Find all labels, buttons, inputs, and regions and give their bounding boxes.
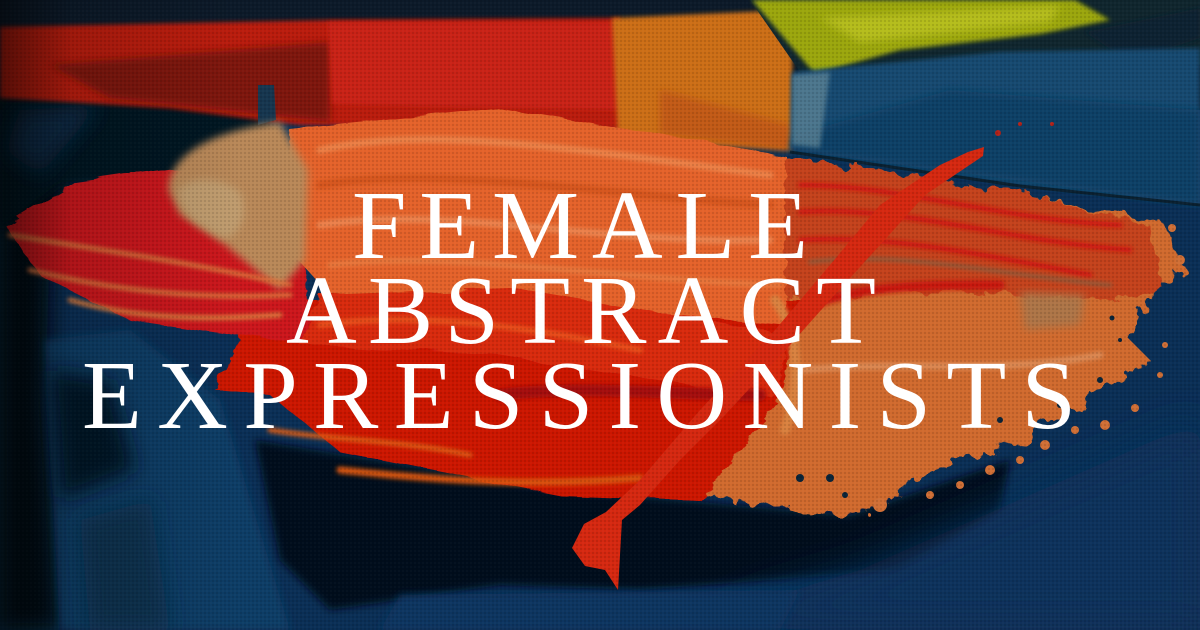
diagonal red drip xyxy=(572,147,984,590)
red top band xyxy=(0,18,625,130)
yellow green paint xyxy=(752,0,1110,74)
dark left edge xyxy=(0,90,100,630)
top right dark band xyxy=(750,0,1200,72)
blue upper right block xyxy=(790,48,1200,205)
title xyxy=(82,172,1076,450)
red paint splatter xyxy=(995,122,1054,136)
title line 2: ABSTRACT xyxy=(286,257,876,365)
dark shadow under stroke xyxy=(255,440,1010,610)
big red brush stroke, left and centre xyxy=(5,108,800,500)
beige patch xyxy=(168,122,308,290)
orange speckles at right edge xyxy=(873,224,1185,512)
orange square xyxy=(612,10,793,150)
title line 1: FEMALE xyxy=(352,172,808,280)
dark flecks in orange stroke xyxy=(796,316,1122,498)
mid blue lower left panel xyxy=(45,330,290,630)
brush streaks xyxy=(10,140,1130,482)
big red brush stroke, right section xyxy=(680,155,1185,515)
underlay joining stroke parts xyxy=(215,300,800,500)
upper left dark blue xyxy=(0,100,300,230)
title line 3: EXPRESSIONISTS xyxy=(82,342,1076,450)
dark top band xyxy=(0,0,1200,110)
small dark peg xyxy=(258,85,276,125)
lower right blue xyxy=(700,420,1200,630)
